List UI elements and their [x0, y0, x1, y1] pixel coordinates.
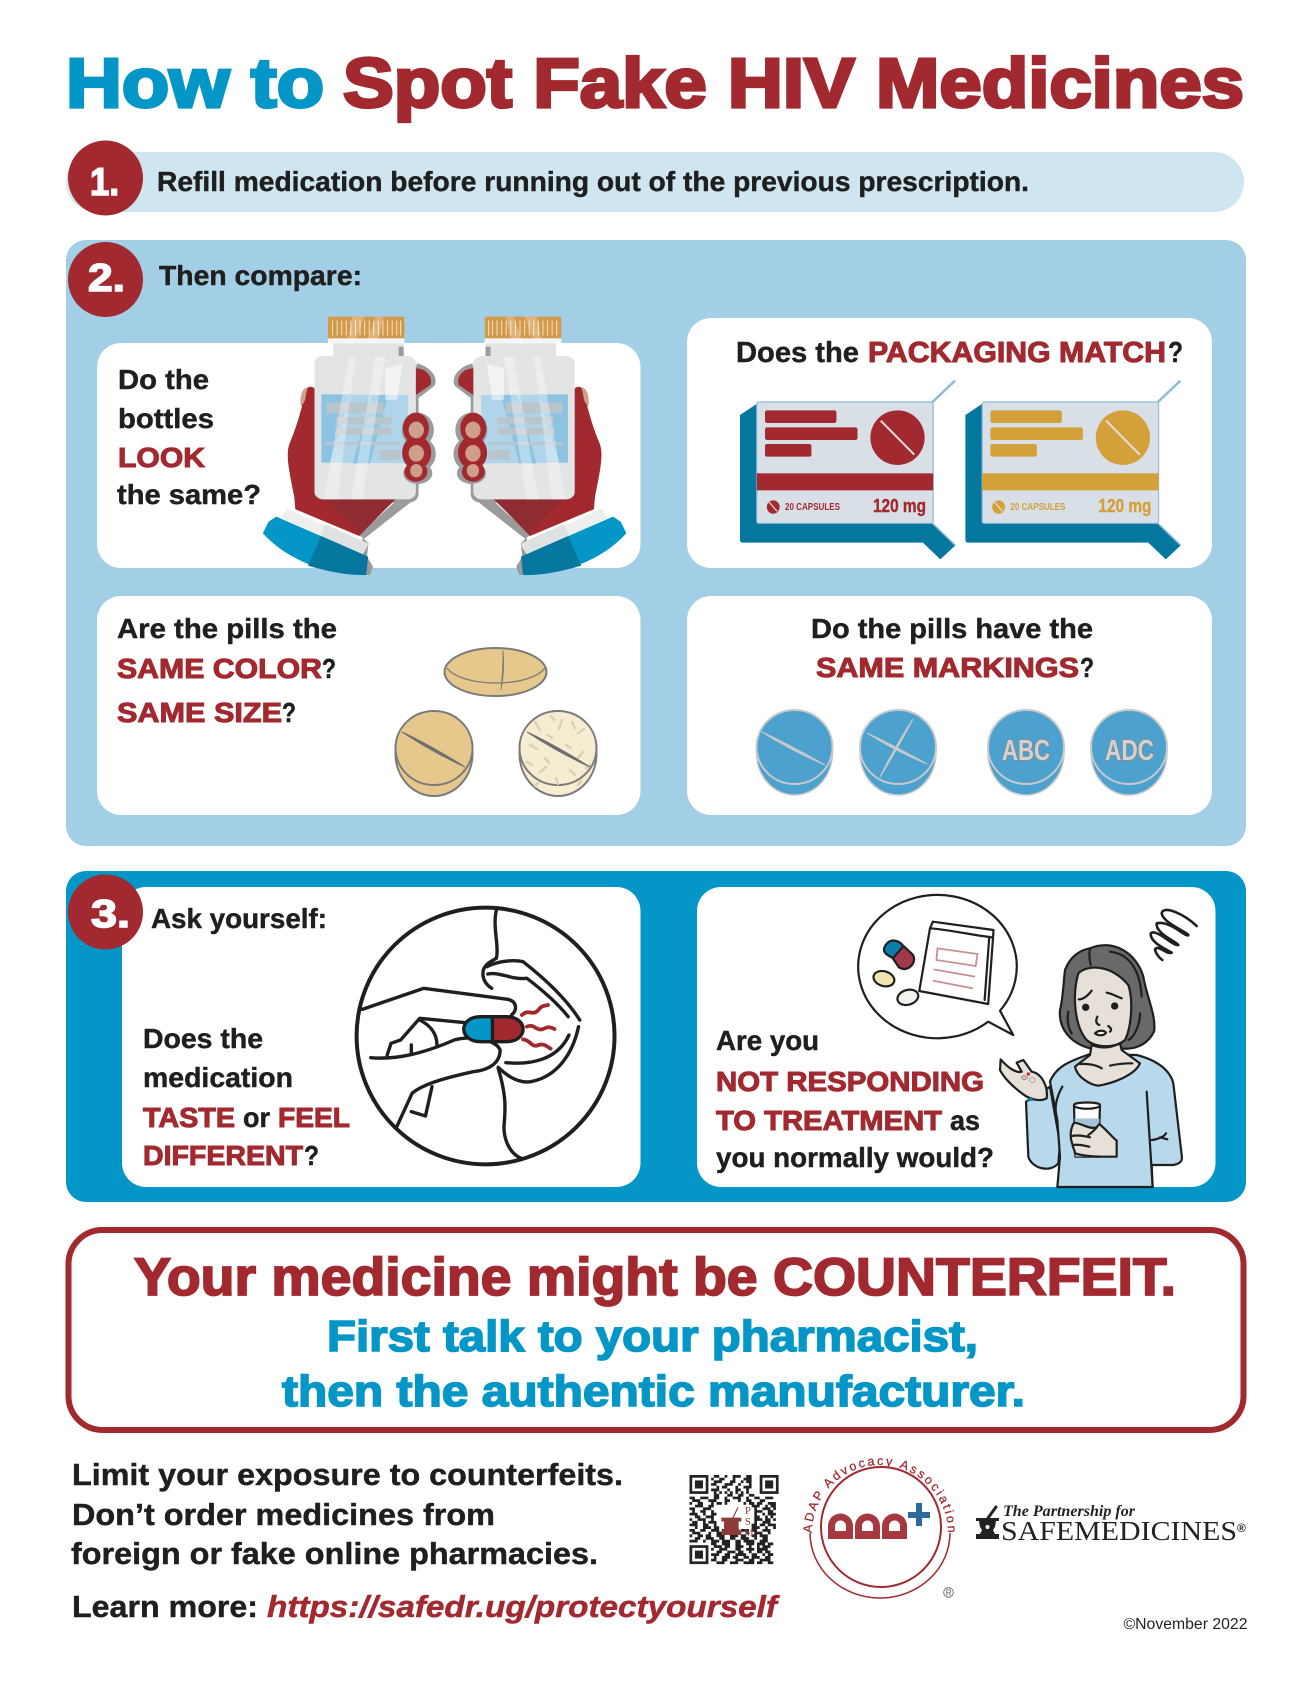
- logo: The Partnership for Safe Medicines: [976, 1503, 1246, 1546]
- illustration: hands holding bottles: [263, 317, 626, 575]
- icon: QR mortar: S: [745, 1516, 751, 1528]
- step 1 text: Refill medication before running out of the previous prescription.: [157, 166, 1029, 197]
- icon: tan pill side view: [444, 648, 546, 696]
- card: not responding: [697, 887, 1216, 1187]
- callout advice: then the authentic manufacturer.: [282, 1367, 1025, 1416]
- card: pill markings: [687, 596, 1212, 815]
- logo: ADAP Advocacy Association: R: [946, 1588, 952, 1598]
- text: limit exposure advice: foreign or fake online pharmacies.: [71, 1536, 598, 1571]
- callout headline: Your medicine might be COUNTERFEIT.: [134, 1248, 1176, 1307]
- title: Spot Fake HIV Medicines: [343, 44, 1244, 122]
- icon: QR mortar: M: [744, 1527, 754, 1539]
- icon: capsule: [464, 1017, 523, 1042]
- step 3 badge: [68, 874, 143, 950]
- card: pill color and size: [97, 596, 640, 815]
- illustration: gold package: [965, 381, 1181, 559]
- text: not responding question: TO TREATMENT: [716, 1105, 942, 1136]
- text: bottles question: Do the: [118, 364, 209, 395]
- text: taste question: Does the: [143, 1023, 263, 1054]
- text: not responding question: you normally would?: [716, 1142, 994, 1173]
- text: limit exposure advice: Limit your exposure to counterfeits.: [72, 1457, 623, 1492]
- icon: capsule in bubble: [884, 941, 914, 969]
- card: packaging: [687, 318, 1212, 568]
- icon: blue pill ADC: ADC: [1105, 735, 1154, 767]
- icon: blue pill ADC: [1091, 710, 1167, 795]
- text: pill color and size question: ?: [322, 653, 336, 684]
- icon: blue pill single score: [756, 710, 832, 795]
- illustration: worried woman: [1000, 910, 1197, 1187]
- step 1 banner: [66, 140, 1244, 216]
- step 3 badge: 3.: [91, 893, 130, 936]
- step 3 heading: Ask yourself:: [151, 903, 327, 934]
- logo: The Partnership for Safe Medicines: ®: [1237, 1521, 1246, 1535]
- text: pill color and size question: Are the pills the: [117, 613, 337, 644]
- panel: step 3 ask yourself: [66, 871, 1246, 1202]
- illustration: red package: [740, 381, 956, 559]
- callout advice: First talk to your pharmacist,: [327, 1312, 978, 1361]
- illustration: speech bubble with medicines: [858, 895, 1017, 1038]
- illustration: red package: 120 mg: [873, 496, 926, 516]
- text: bottles question: bottles: [118, 403, 214, 434]
- text: packaging question: [736, 337, 1183, 369]
- text: taste question: DIFFERENT: [143, 1140, 303, 1171]
- text: not responding question: Are you: [716, 1025, 819, 1056]
- card: bottles: [97, 343, 640, 568]
- text: pill markings question: Do the pills have the: [811, 613, 1093, 644]
- text: limit exposure advice: [71, 1457, 623, 1571]
- icon: tan pill: [396, 711, 472, 796]
- illustration: gold package: 20 CAPSULES: [1010, 501, 1065, 513]
- copyright: ©November 2022: [1124, 1616, 1248, 1633]
- title: How to: [66, 44, 324, 122]
- text: pill color and size question: SAME COLOR: [117, 653, 322, 684]
- text: packaging question: ?: [1168, 337, 1183, 369]
- text: packaging question: Does the: [736, 337, 859, 369]
- logo: ADAP Advocacy Association: ADAP Advocacy Association: [803, 1458, 955, 1534]
- illustration: gold package: 120 mg: [1098, 496, 1151, 516]
- text: limit exposure advice: Don’t order medicines from: [72, 1497, 495, 1532]
- step 1 badge: [68, 140, 143, 216]
- panel: step 2 compare: [66, 240, 1246, 846]
- text: pill color and size question: ?: [282, 697, 296, 728]
- text: taste question: or: [243, 1102, 270, 1133]
- text: taste question: [143, 1023, 350, 1171]
- text: pill markings question: ?: [1080, 652, 1094, 683]
- icon: blue pill ABC: ABC: [1002, 735, 1050, 767]
- icon: speckled pill: [520, 711, 596, 796]
- text: packaging question: PACKAGING MATCH: [868, 337, 1166, 369]
- text: bottles question: the same?: [117, 479, 261, 510]
- step 2 badge: [68, 242, 143, 317]
- text: pill markings question: [811, 613, 1094, 683]
- callout advice: [282, 1312, 1025, 1416]
- logo: The Partnership for Safe Medicines: SAFEMEDICINES: [1001, 1516, 1237, 1546]
- step 1 badge: 1.: [90, 161, 119, 204]
- logo: The Partnership for Safe Medicines: The Partnership for: [1003, 1503, 1136, 1520]
- text: not responding question: [716, 1025, 994, 1173]
- text: bottles question: LOOK: [118, 442, 205, 473]
- text: not responding question: as: [950, 1105, 980, 1136]
- step 2 heading: Then compare:: [159, 260, 362, 291]
- QR code: [690, 1476, 777, 1563]
- text: not responding question: NOT RESPONDING: [716, 1066, 984, 1097]
- text: bottles question: [117, 364, 261, 510]
- icon: QR mortar: P: [745, 1505, 751, 1517]
- text: taste question: medication: [143, 1062, 293, 1093]
- logo: ADAP Advocacy Association: [803, 1458, 955, 1599]
- icon: blue pill cross score: [860, 710, 936, 795]
- icon: mortar and pestle: [976, 1507, 999, 1539]
- card: taste and feel: [122, 887, 640, 1187]
- illustration: red package: 20 CAPSULES: [785, 501, 840, 513]
- text: taste question: FEEL: [278, 1102, 350, 1133]
- text: learn more link: https://safedr.ug/protectyourself: [267, 1589, 780, 1624]
- step 2 badge: 2.: [88, 257, 125, 300]
- text: pill color and size question: SAME SIZE: [117, 697, 282, 728]
- callout: counterfeit warning: [68, 1230, 1244, 1430]
- illustration: pill placed in mouth: [357, 908, 615, 1164]
- icon: QR mortar: [722, 1505, 754, 1539]
- text: learn more link: [72, 1589, 780, 1624]
- text: pill markings question: SAME MARKINGS: [816, 652, 1079, 683]
- text: pill color and size question: [117, 613, 337, 728]
- icon: blue pill ABC: [988, 710, 1064, 795]
- text: learn more link: Learn more:: [72, 1589, 258, 1624]
- text: taste question: TASTE: [143, 1102, 235, 1133]
- text: taste question: ?: [304, 1140, 319, 1171]
